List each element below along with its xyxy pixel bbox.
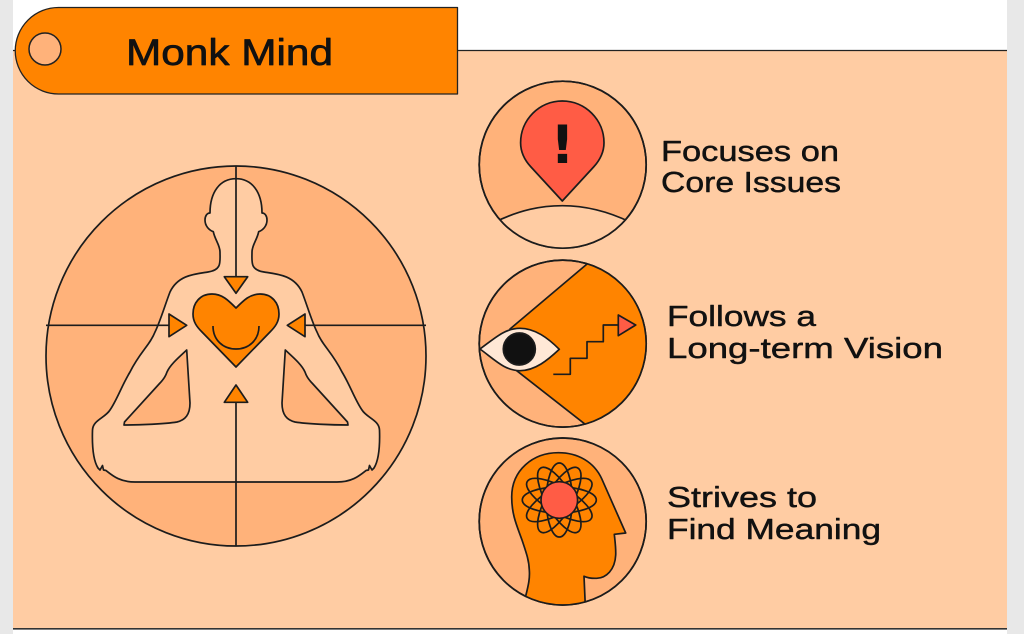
large circle: [46, 166, 426, 546]
icon: location pin with exclamation: [479, 81, 646, 255]
flower petals: [521, 461, 598, 539]
arrow left: [287, 314, 305, 337]
arrow head: [618, 315, 636, 336]
right arm gap: [282, 350, 348, 425]
label: focuses on core issues: [661, 136, 841, 199]
body silhouette: [92, 179, 380, 482]
icon: eye with staircase vision: [479, 260, 660, 430]
staircase line: [553, 325, 618, 374]
smile: [213, 326, 259, 349]
arrow up: [224, 385, 248, 402]
left arm gap: [124, 350, 190, 425]
pupil: [503, 333, 535, 365]
icon: head with flower: [479, 438, 646, 610]
label: follows a long-term vision: Follows a: [667, 301, 817, 333]
circle outline over cone: [479, 260, 646, 427]
arrow down: [224, 277, 248, 293]
pin: [521, 101, 604, 201]
meditating figure illustration: [46, 166, 426, 546]
tab hole: [29, 33, 61, 65]
label: strives to find meaning: [667, 482, 881, 546]
arrow right: [169, 314, 187, 337]
flower centre: [541, 482, 578, 518]
circle outline over head: [479, 438, 646, 605]
exclamation mark: !: [550, 115, 575, 176]
title tab: [15, 8, 458, 94]
label: strives to find meaning: Find Meaning: [667, 514, 881, 546]
circle outline over ground: [479, 81, 646, 248]
label: follows a long-term vision: Long-term Vision: [667, 333, 943, 365]
ground arc: [500, 204, 625, 248]
label: focuses on core issues: Core Issues: [661, 167, 841, 199]
label: follows a long-term vision: [667, 301, 943, 365]
vision cone: [509, 264, 646, 424]
label: focuses on core issues: Focuses on: [661, 136, 839, 168]
title text: Monk Mind: [126, 32, 333, 73]
label: strives to find meaning: Strives to: [667, 482, 817, 514]
axis lines: [46, 166, 426, 546]
heart: [193, 294, 279, 367]
eye: [480, 328, 559, 371]
head silhouette: [512, 453, 626, 610]
